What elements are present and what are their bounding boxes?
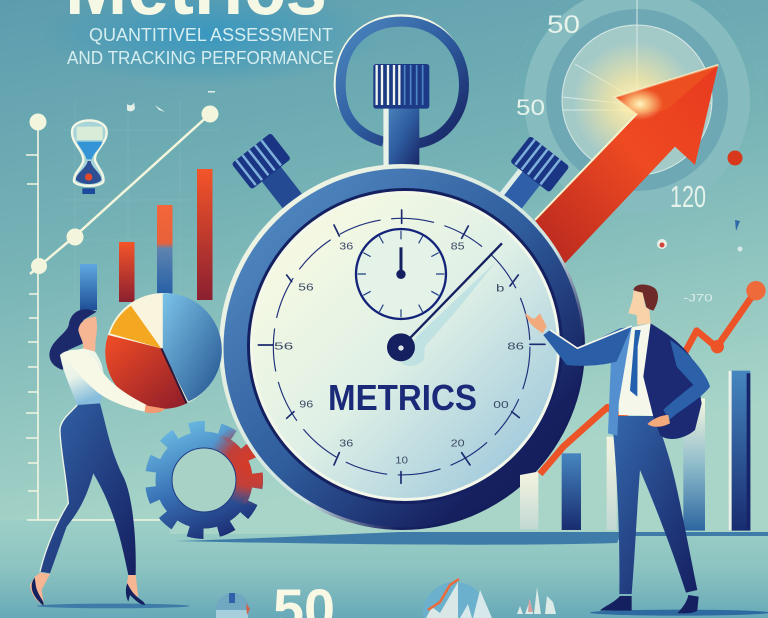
gauge labels: 120: [670, 179, 706, 214]
man tie: [630, 330, 641, 397]
dial numerals: 56: [274, 341, 294, 352]
crown knob: [373, 64, 429, 109]
man: [525, 285, 768, 616]
gauge labels: 50: [516, 95, 545, 120]
man shirt: [619, 323, 655, 416]
pie chart: [105, 293, 222, 409]
crown stem: [383, 105, 419, 172]
bottom: small dial icon: [216, 593, 250, 618]
woman hair: [49, 309, 97, 370]
gauge labels: [516, 11, 706, 214]
dial label: METRICS: [328, 377, 477, 418]
trend line: [30, 106, 218, 274]
man jacket right: [643, 323, 702, 439]
dial numerals: b: [496, 284, 505, 295]
side knob right: [489, 136, 570, 219]
woman face: [78, 317, 97, 352]
chart small label: -J70: [683, 293, 713, 305]
chart grid: [60, 100, 220, 300]
woman arm: [67, 352, 147, 412]
woman legs: [40, 403, 136, 575]
dial face: [253, 194, 557, 498]
icon: hourglass: [72, 120, 107, 194]
case: [219, 164, 585, 530]
bottom: mini bars icon: [517, 587, 556, 614]
dial numerals: 20: [451, 439, 465, 450]
crown ring: [336, 17, 464, 172]
stopwatch: [219, 17, 585, 530]
dial numerals: 86: [507, 341, 524, 352]
man jacket left: [608, 327, 632, 436]
man shadow: [590, 610, 768, 616]
small specks: [657, 220, 742, 252]
dial numerals: 56: [298, 283, 314, 294]
man left arm: [543, 327, 632, 366]
dial details: [258, 210, 545, 483]
tick marks: [258, 210, 545, 483]
red trend line: [540, 291, 756, 474]
man right hand: [647, 415, 670, 427]
red dot: [728, 150, 742, 166]
dial numerals: 10: [395, 455, 408, 466]
long hand: [387, 243, 502, 366]
subtitle: [67, 25, 334, 68]
man hair: [633, 285, 658, 311]
sub dial: [356, 229, 446, 319]
dial numerals: 96: [299, 400, 314, 411]
woman hand: [145, 405, 165, 413]
scale ring: [273, 218, 530, 475]
right bar chart: [520, 281, 766, 531]
man face: [628, 291, 651, 325]
gear: [152, 428, 256, 532]
gauge labels: 50: [547, 11, 580, 39]
gauge dial: upper right: [513, 0, 761, 224]
chart bars: [80, 169, 212, 310]
dial numerals: 00: [493, 400, 509, 411]
man legs: [613, 416, 697, 594]
title glow: [40, 0, 380, 85]
dial numerals: 36: [339, 439, 354, 450]
chart axis: [26, 122, 160, 520]
subtitle: QUANTITIVEL ASSESSMENT: [89, 25, 333, 45]
woman shadow: [37, 604, 190, 608]
small chart marks: [127, 91, 215, 112]
dial numerals: 85: [451, 241, 465, 252]
arrow: [535, 65, 718, 263]
dial numerals: [274, 241, 524, 466]
woman shoes: [30, 573, 50, 605]
man shoes: [600, 596, 632, 611]
subtitle: AND TRACKING PERFORMANCE: [67, 48, 334, 68]
dial numerals: 36: [339, 241, 354, 252]
left line chart: [26, 100, 220, 520]
woman torso: [60, 348, 104, 406]
man right arm: [663, 340, 710, 420]
floor: [0, 520, 768, 618]
woman: [30, 309, 190, 608]
bottom: circular chart icon: [423, 579, 492, 618]
side knob left: [231, 133, 312, 216]
man hand: [525, 313, 547, 333]
